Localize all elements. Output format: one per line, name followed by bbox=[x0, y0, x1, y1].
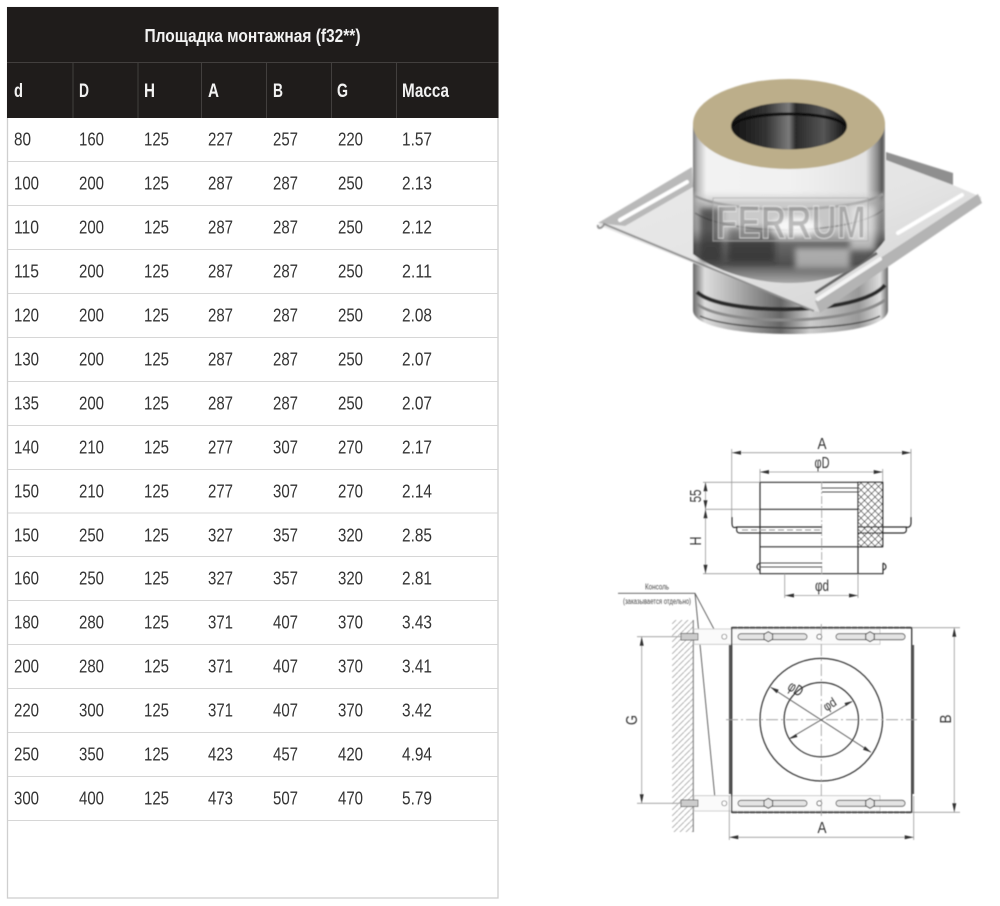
table row 250: 250 bbox=[14, 744, 39, 764]
table row 150 D210: 277 bbox=[208, 482, 233, 502]
table row 140: 210 bbox=[79, 438, 104, 458]
table row 120 bbox=[14, 306, 432, 326]
elevation body with plate bbox=[732, 482, 911, 574]
table row 220: 371 bbox=[208, 700, 233, 720]
table row 220: 125 bbox=[144, 700, 169, 720]
table row 100: 287 bbox=[273, 174, 298, 194]
wall bbox=[672, 620, 693, 832]
panel: dimensions table bbox=[7, 7, 498, 898]
table row 250: 350 bbox=[79, 744, 104, 764]
table column headers bbox=[7, 62, 498, 118]
table row 130: 200 bbox=[79, 350, 104, 370]
table row 150 D250: 250 bbox=[79, 526, 104, 546]
table row 200: 3.41 bbox=[402, 656, 432, 676]
table row 140: 307 bbox=[273, 438, 298, 458]
table row 160: 125 bbox=[144, 568, 169, 588]
table row 180: 407 bbox=[273, 612, 298, 632]
table row 100: 125 bbox=[144, 174, 169, 194]
dimensions 55 and H: H bbox=[688, 536, 705, 546]
dimensions 55 and H: 55 bbox=[688, 489, 705, 502]
table row 115: 2.11 bbox=[402, 262, 432, 282]
table title bar: Площадка монтажная (f32**) bbox=[144, 25, 360, 46]
dimensions 55 and H bbox=[688, 482, 760, 574]
table row 115: 250 bbox=[338, 262, 363, 282]
table row 250: 420 bbox=[338, 744, 363, 764]
table row 150 D250: 357 bbox=[273, 526, 298, 546]
table row 150 D210: 150 bbox=[14, 482, 39, 502]
insulation ring bbox=[693, 79, 885, 169]
table row 250: 457 bbox=[273, 744, 298, 764]
table row 110: 2.12 bbox=[402, 218, 432, 238]
dimension G bbox=[624, 637, 682, 803]
table row 200: 125 bbox=[144, 656, 169, 676]
table row 180: 125 bbox=[144, 612, 169, 632]
table frame bbox=[8, 8, 498, 898]
table row 140: 125 bbox=[144, 438, 169, 458]
table row 220 bbox=[14, 700, 432, 720]
table row 150 D250: 320 bbox=[338, 526, 363, 546]
table row 100: 200 bbox=[79, 174, 104, 194]
table row 110: 287 bbox=[208, 218, 233, 238]
dimension B: B bbox=[938, 714, 955, 724]
table row 100: 2.13 bbox=[402, 174, 432, 194]
table row 130: 287 bbox=[273, 350, 298, 370]
table row 200: 370 bbox=[338, 656, 363, 676]
table column headers: G bbox=[337, 81, 348, 102]
table row 250: 125 bbox=[144, 744, 169, 764]
table row 100: 100 bbox=[14, 174, 39, 194]
table row 150 D210: 125 bbox=[144, 482, 169, 502]
table row 120: 250 bbox=[338, 306, 363, 326]
table column headers: d bbox=[14, 81, 23, 102]
table row 250: 4.94 bbox=[402, 744, 432, 764]
table row 110 bbox=[14, 218, 432, 238]
table row 130 bbox=[14, 350, 432, 370]
table row 200: 371 bbox=[208, 656, 233, 676]
table row 150 D210: 2.14 bbox=[402, 482, 432, 502]
table row 160: 357 bbox=[273, 568, 298, 588]
table row 180: 370 bbox=[338, 612, 363, 632]
table row 120: 287 bbox=[273, 306, 298, 326]
table row 300 bbox=[14, 788, 432, 808]
dimension φD bbox=[760, 455, 883, 482]
table row 140: 140 bbox=[14, 438, 39, 458]
table row 140: 2.17 bbox=[402, 438, 432, 458]
table row 180: 371 bbox=[208, 612, 233, 632]
table row 100 bbox=[14, 174, 432, 194]
table row 160: 250 bbox=[79, 568, 104, 588]
table row 220: 220 bbox=[14, 700, 39, 720]
table row 200: 280 bbox=[79, 656, 104, 676]
table row 100: 287 bbox=[208, 174, 233, 194]
table column headers: B bbox=[273, 81, 283, 102]
table row 150 D250: 125 bbox=[144, 526, 169, 546]
table row 120: 200 bbox=[79, 306, 104, 326]
table row 130: 130 bbox=[14, 350, 39, 370]
plate slots bbox=[620, 182, 962, 233]
product photo: mounting platform bbox=[598, 79, 982, 334]
table row 140: 277 bbox=[208, 438, 233, 458]
table row 300: 473 bbox=[208, 788, 233, 808]
table row 120: 120 bbox=[14, 306, 39, 326]
console callout: Консоль bbox=[645, 582, 669, 592]
table row 115: 115 bbox=[14, 262, 39, 282]
table row 135: 135 bbox=[14, 394, 39, 414]
table row 180: 180 bbox=[14, 612, 39, 632]
dimension A: A bbox=[818, 436, 827, 453]
table row 135: 200 bbox=[79, 394, 104, 414]
table row 150 D250: 327 bbox=[208, 526, 233, 546]
table row 80 bbox=[14, 130, 432, 150]
row divider lines bbox=[8, 162, 498, 820]
dimension A lower: A bbox=[818, 820, 827, 837]
technical drawing: plan view bbox=[618, 582, 960, 840]
table row 80: 227 bbox=[208, 130, 233, 150]
table row 220: 407 bbox=[273, 700, 298, 720]
table row 115: 287 bbox=[273, 262, 298, 282]
lower pipe section bbox=[693, 240, 888, 334]
dimension G: G bbox=[624, 715, 641, 725]
table row 160: 160 bbox=[14, 568, 39, 588]
table row 115: 287 bbox=[208, 262, 233, 282]
table row 110: 110 bbox=[14, 218, 39, 238]
table row 115: 125 bbox=[144, 262, 169, 282]
table row 115 bbox=[14, 262, 432, 282]
dimension A lower bbox=[729, 796, 914, 840]
console brackets bbox=[681, 629, 880, 811]
table row 80: 80 bbox=[14, 130, 31, 150]
table title bar bbox=[7, 7, 498, 62]
table row 130: 250 bbox=[338, 350, 363, 370]
upper pipe section bbox=[693, 123, 885, 283]
table row 150 D210: 307 bbox=[273, 482, 298, 502]
technical drawing: side elevation bbox=[688, 436, 911, 598]
table row 150 D210: 270 bbox=[338, 482, 363, 502]
pipe opening bbox=[731, 102, 847, 150]
table row 300: 125 bbox=[144, 788, 169, 808]
table row 150 D250 bbox=[14, 526, 432, 546]
table column headers: A bbox=[208, 81, 219, 102]
dimension φd bbox=[785, 574, 858, 598]
table row 300: 507 bbox=[273, 788, 298, 808]
mounting plate bbox=[598, 152, 982, 313]
table row 120: 2.08 bbox=[402, 306, 432, 326]
table row 250 bbox=[14, 744, 432, 764]
table row 80: 220 bbox=[338, 130, 363, 150]
table row 200 bbox=[14, 656, 432, 676]
dimension φd: φd bbox=[815, 578, 829, 595]
table row 80: 257 bbox=[273, 130, 298, 150]
table row 135: 287 bbox=[273, 394, 298, 414]
table row 110: 125 bbox=[144, 218, 169, 238]
table row 135: 250 bbox=[338, 394, 363, 414]
table row 80: 160 bbox=[79, 130, 104, 150]
table row 140: 270 bbox=[338, 438, 363, 458]
table row 180: 280 bbox=[79, 612, 104, 632]
table row 220: 3.42 bbox=[402, 700, 432, 720]
concentric circles and diameters: φD bbox=[785, 678, 806, 700]
table row 100: 250 bbox=[338, 174, 363, 194]
table row 135 bbox=[14, 394, 432, 414]
table row 200: 200 bbox=[14, 656, 39, 676]
table row 135: 2.07 bbox=[402, 394, 432, 414]
chrome reflections bbox=[700, 206, 875, 268]
table row 135: 125 bbox=[144, 394, 169, 414]
slots and bolts bbox=[738, 632, 905, 808]
table row 160: 320 bbox=[338, 568, 363, 588]
table row 300: 400 bbox=[79, 788, 104, 808]
console callout bbox=[618, 582, 720, 803]
table row 220: 370 bbox=[338, 700, 363, 720]
dimension φD: φD bbox=[814, 455, 830, 472]
table row 130: 287 bbox=[208, 350, 233, 370]
concentric circles and diameters: φd bbox=[820, 694, 839, 714]
table row 110: 200 bbox=[79, 218, 104, 238]
table column headers: D bbox=[79, 81, 89, 102]
table column headers: H bbox=[144, 81, 155, 102]
concentric circles and diameters bbox=[726, 624, 917, 816]
table row 300: 470 bbox=[338, 788, 363, 808]
table row 180: 3.43 bbox=[402, 612, 432, 632]
table row 220: 300 bbox=[79, 700, 104, 720]
table row 115: 200 bbox=[79, 262, 104, 282]
table row 110: 287 bbox=[273, 218, 298, 238]
table row 300: 5.79 bbox=[402, 788, 432, 808]
console callout: (заказывается отдельно) bbox=[623, 597, 691, 606]
table row 300: 300 bbox=[14, 788, 39, 808]
table row 200: 407 bbox=[273, 656, 298, 676]
table row 150 D210 bbox=[14, 482, 432, 502]
table row 140 bbox=[14, 438, 432, 458]
table row 150 D210: 210 bbox=[79, 482, 104, 502]
table row 120: 125 bbox=[144, 306, 169, 326]
table row 130: 125 bbox=[144, 350, 169, 370]
square plate bbox=[730, 628, 913, 812]
dimension A bbox=[732, 436, 911, 517]
watermark FERRUM: FERRUM bbox=[716, 196, 866, 248]
table row 110: 250 bbox=[338, 218, 363, 238]
table row 150 D250: 2.85 bbox=[402, 526, 432, 546]
table row 135: 287 bbox=[208, 394, 233, 414]
table row 160: 327 bbox=[208, 568, 233, 588]
table row 130: 2.07 bbox=[402, 350, 432, 370]
table row 250: 423 bbox=[208, 744, 233, 764]
table row 180 bbox=[14, 612, 432, 632]
table column headers: Масса bbox=[402, 81, 449, 102]
table row 80: 1.57 bbox=[402, 130, 432, 150]
dimension B bbox=[912, 628, 960, 812]
table row 80: 125 bbox=[144, 130, 169, 150]
table row 150 D250: 150 bbox=[14, 526, 39, 546]
table row 160: 2.81 bbox=[402, 568, 432, 588]
table row 120: 287 bbox=[208, 306, 233, 326]
table row 160 bbox=[14, 568, 432, 588]
